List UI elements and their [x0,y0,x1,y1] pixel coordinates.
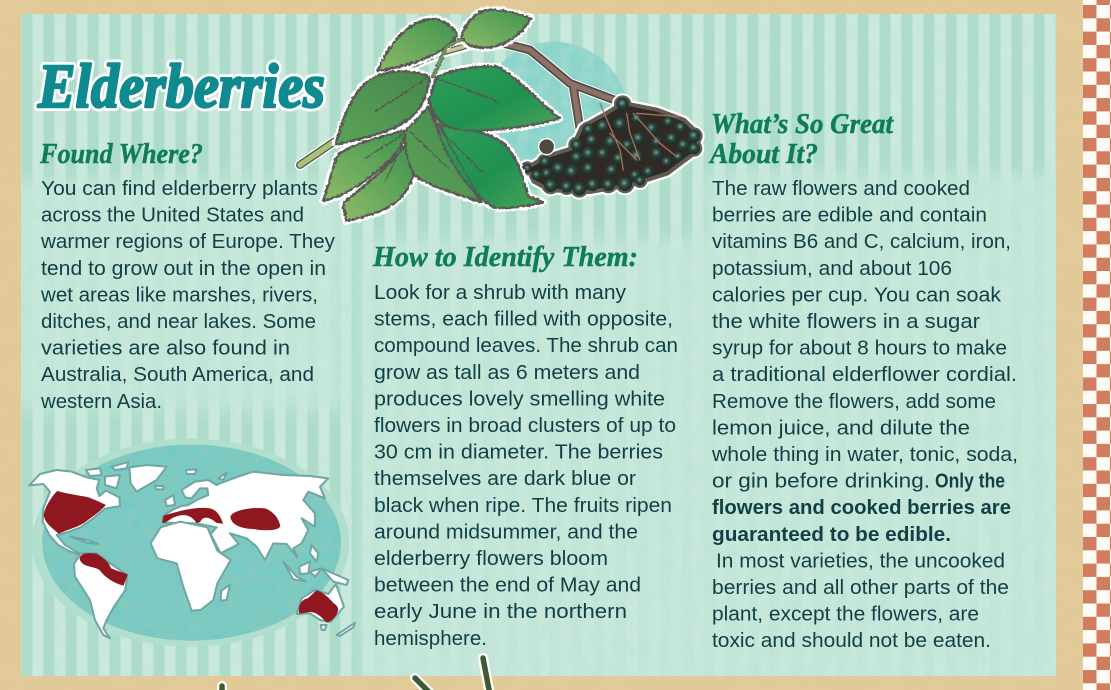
text block: found where: You can find elderberry plants [41,177,318,200]
text block: what's so great: the white flowers in a sugar [712,310,980,333]
text block: what's so great: a traditional elderflower cordial. [712,363,1017,386]
text block: what's so great: or gin before drinking. [712,470,930,493]
leaf: top left [378,19,457,71]
text block: how to identify: flowers in broad clusters of up to [374,414,676,437]
map ocean [32,439,349,647]
berry cluster [523,98,700,195]
text block: what's so great: lemon juice, and dilute the [712,416,970,439]
heading: what's so great: About It? [708,138,818,170]
heading: how to identify: How to Identify Them: [372,241,638,273]
text block: what's so great: vitamins B6 and C, calcium, iron, [712,230,1011,253]
teal circle behind branch [478,42,628,192]
leaf: bottom left [343,147,413,221]
text block: found where: warmer regions of Europe. They [40,230,336,253]
text block: how to identify: around midsummer, and the [374,520,638,543]
text block: found where: Australia, South America, and [41,363,314,386]
text block: what's so great: potassium, and about 106 [712,257,952,280]
text block: what's so great: The raw flowers and cooked [712,177,970,200]
text block: how to identify: between the end of May and [374,574,641,597]
text block: what's so great: toxic and should not be eaten. [712,629,991,652]
text block: what's so great: In most varieties, the uncooked [716,549,1005,572]
text block: how to identify: compound leaves. The shrub can [374,334,678,357]
title: Elderberries [37,53,325,121]
leaf: centre lower [405,107,481,202]
leaves [323,10,559,221]
map range markers [44,491,338,622]
heading: found where: Found Where? [39,138,203,170]
leaf: left large [336,71,429,144]
text block: found where: western Asia. [40,390,162,413]
text block: how to identify: grow as tall as 6 meters and [374,361,640,384]
text block: what's so great: Only the [935,470,1005,493]
text block: what's so great: berries are edible and contain [712,204,987,227]
text block: found where [40,177,336,413]
text block: what's so great: guaranteed to be edible. [712,523,951,546]
text block: how to identify: elderberry flowers bloom [374,547,608,570]
text block: what's so great: flowers and cooked berries are [712,496,1011,519]
text block: found where: tend to grow out in the open in [41,257,326,280]
text block: what's so great: syrup for about 8 hours to make [712,337,1007,360]
text block: found where: wet areas like marshes, rivers, [40,283,318,306]
text block: what's so great: whole thing in water, tonic, soda, [711,443,1018,466]
text block: what's so great: berries and all other parts of the [712,576,1009,599]
leaf: lower left [323,131,405,201]
title: Elderberries [37,53,325,121]
map continents [29,462,355,638]
branch stems [300,43,623,165]
text block: what's so great [711,177,1018,652]
bottom plant stems [222,658,490,690]
leaf: top [462,10,531,47]
text block: found where: across the United States and [41,204,304,227]
text block: found where: varieties are also found in [41,337,290,360]
text block: found where: ditches, and near lakes. Some [41,310,316,333]
leaf: right lower [437,125,543,208]
text block: how to identify [374,281,678,650]
world map [29,439,355,647]
text block: how to identify: early June in the northern [374,600,627,623]
text block: how to identify: produces lovely smelling white [374,387,665,410]
text block: how to identify: hemisphere. [374,627,487,650]
text block: how to identify: stems, each filled with opposite, [374,308,673,331]
text block: how to identify: black when ripe. The fruits ripen [374,494,672,517]
heading: what's so great [708,108,894,170]
text block: what's so great: Remove the flowers, add some [712,390,996,413]
text block: what's so great: calories per cup. You can soak [712,283,1002,306]
text block: what's so great: plant, except the flowers, are [712,603,979,626]
heading: what's so great: What’s So Great [711,108,894,140]
illustration: elderberry branch [300,10,700,221]
checkered border [1083,0,1111,690]
text block: how to identify: themselves are dark blue or [374,467,636,490]
leaf: right upper [429,67,559,131]
text block: how to identify: 30 cm in diameter. The berries [374,441,663,464]
text block: how to identify: Look for a shrub with many [374,281,627,304]
